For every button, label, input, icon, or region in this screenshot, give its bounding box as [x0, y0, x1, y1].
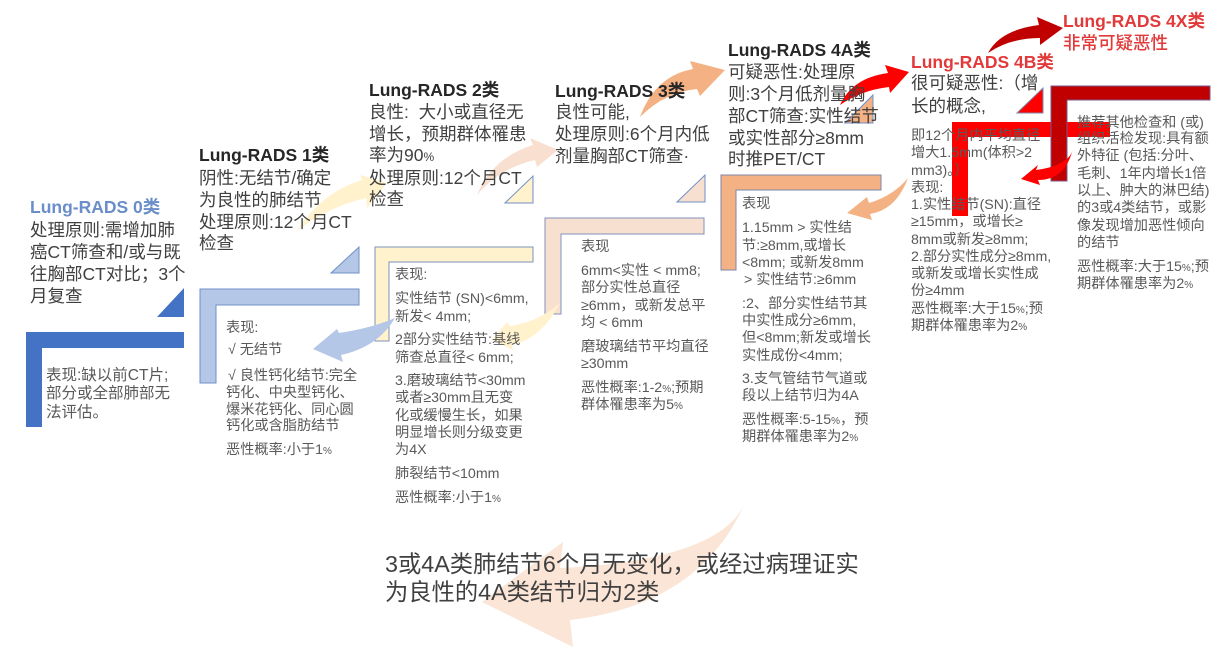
text: category 1 heading and rule	[199, 145, 352, 253]
text: category 0 findings: 部分或全部肺部无	[46, 384, 170, 402]
text: category 2 findings: 为4X	[395, 442, 427, 458]
text: category 4X findings: 的3或4类结节，或影	[1077, 200, 1206, 216]
text: category 4X findings: 推荐其他检查和 (或)	[1077, 115, 1204, 131]
text: category 3 findings: ≥30mm	[581, 356, 628, 372]
bracket: category 4B	[952, 122, 1110, 216]
text: category 4X findings: 以上、肿大的淋巴结)	[1077, 183, 1209, 199]
text: category 4B findings: 表现:	[911, 180, 943, 196]
text: category 4B findings: 1.实性结节(SN):直径	[911, 196, 1041, 213]
text: category 4B findings: 恶性概率:大于15%;预	[911, 300, 1043, 317]
text: category 2 findings: 实性结节 (SN)<6mm,	[395, 291, 529, 307]
arrow: category 2 to 3	[477, 138, 558, 195]
text: category 4A findings: 恶性概率:5-15%，预	[742, 411, 868, 428]
text: category 3 findings: 部分实性总直径	[581, 279, 680, 296]
text: category 4X findings: 外特征 (包括:分叶、	[1077, 148, 1203, 164]
triangle: category 0	[157, 288, 184, 317]
triangle: category 2	[505, 176, 533, 203]
text: category 2 heading and rule: 处理原则:12个月CT	[369, 168, 522, 188]
text: category 4X heading	[1063, 11, 1205, 53]
text: category 2 findings: 明显增长则分级变更	[395, 425, 523, 441]
text: category 3 findings	[581, 239, 709, 413]
text: category 0 findings	[46, 366, 170, 421]
bracket: category 2	[375, 247, 533, 341]
text: category 1 findings	[226, 320, 357, 458]
text: category 1 findings: 恶性概率:小于1%	[226, 441, 332, 458]
text: category 3 heading and rule: 剂量胸部CT筛查·	[555, 146, 689, 166]
arrow: category 4B to 4X	[988, 17, 1063, 53]
text: category 2 findings	[395, 267, 529, 506]
text: category 2 findings: 表现:	[395, 267, 427, 283]
text: category 4A findings: <8mm; 或新发8mm	[742, 255, 864, 271]
arrow: 4B back to 4A	[847, 178, 908, 220]
text: category 3 findings: 表现	[581, 239, 609, 255]
bracket: category 1	[200, 289, 359, 383]
text: category 4B heading and rule: 很可疑恶性:（增	[911, 73, 1038, 93]
text: category 1 heading and rule: 处理原则:12个月CT	[199, 212, 352, 232]
text: category 2 findings: 恶性概率:小于1%	[395, 489, 501, 506]
text: category 4A findings: 3.支气管结节气道或	[742, 371, 867, 387]
text: category 2 heading and rule: 增长，预期群体罹患	[369, 124, 526, 144]
text: category 0 heading and rule	[30, 197, 186, 306]
text: category 4A heading and rule: 可疑恶性:处理原	[728, 62, 855, 82]
text: category 4X findings: 期群体罹患率为2%	[1077, 275, 1193, 292]
text: category 4B findings: 或新发或增长实性成	[911, 266, 1039, 282]
bracket: category 3	[545, 218, 704, 314]
text: category 1 findings: √ 良性钙化结节:完全	[228, 367, 357, 384]
text: category 4B heading and rule	[911, 52, 1054, 116]
text: category 2 findings: 化或缓慢生长，如果	[395, 407, 523, 424]
text: category 3 heading and rule	[555, 81, 710, 166]
text: category 2 heading and rule: 率为90%	[369, 145, 434, 165]
text: category 4A heading and rule: Lung-RADS 4A类	[728, 40, 871, 60]
text: category 1 heading and rule: 阴性:无结节/确定	[199, 168, 331, 188]
text: category 4X findings: 毛刺、1年内增长1倍	[1077, 166, 1206, 182]
text: bottom note	[385, 551, 859, 605]
triangle: category 3	[677, 175, 705, 202]
text: category 3 findings: 均 < 6mm	[581, 315, 643, 331]
text: category 0 heading and rule: 往胸部CT对比；3个	[30, 264, 186, 284]
text: category 4X heading: 非常可疑恶性	[1063, 33, 1168, 53]
arrow: 4X back to 4B	[1021, 152, 1072, 185]
text: bottom note: 3或4A类肺结节6个月无变化，或经过病理证实	[385, 551, 859, 577]
text: category 3 findings: 恶性概率:1-2%;预期	[581, 379, 703, 396]
text: category 4X findings: 组织活检发现:具有额	[1077, 131, 1209, 147]
text: category 2 findings: 筛查总直径< 6mm;	[395, 349, 514, 366]
text: category 4B heading and rule: Lung-RADS 4B类	[911, 52, 1054, 72]
arrow: category 1 to 2	[296, 175, 387, 232]
text: category 2 heading and rule: Lung-RADS 2类	[369, 80, 500, 100]
text: category 4A findings: 但<8mm;新发或增长	[742, 330, 871, 346]
text: category 4A findings: 实性成份<4mm;	[742, 348, 843, 364]
arrow: 3 back to 2	[492, 303, 560, 350]
triangle: category 1	[331, 247, 359, 273]
text: category 3 findings: 磨玻璃结节平均直径	[581, 338, 709, 355]
text: category 2 findings: 肺裂结节<10mm	[395, 466, 499, 482]
text: category 4X findings	[1077, 115, 1209, 292]
text: category 1 findings: 表现:	[226, 320, 258, 336]
text: category 4A heading and rule: 时推PET/CT	[728, 149, 826, 169]
text: category 1 heading and rule: Lung-RADS 1类	[199, 145, 330, 165]
text: category 4A findings: 段以上结节归为4A	[742, 387, 859, 404]
text: category 4A findings: > 实性结节:≥6mm	[744, 272, 856, 288]
text: category 4A heading and rule: 部CT筛查:实性结节	[728, 106, 879, 126]
text: category 3 heading and rule: 处理原则:6个月内低	[555, 124, 710, 144]
text: category 0 heading and rule: 癌CT筛查和/或与既	[30, 242, 181, 262]
text: category 4X findings: 恶性概率:大于15%;预	[1077, 258, 1209, 275]
text: category 1 findings: √ 无结节	[228, 342, 282, 358]
arrow: large return arrow	[482, 503, 745, 647]
text: category 2 findings: 2部分实性结节:基线	[395, 331, 520, 348]
bracket: category 0	[26, 332, 184, 427]
text: category 4A findings	[742, 196, 871, 445]
text: category 4B findings: 8mm或新发≥8mm;	[911, 232, 1028, 248]
text: category 4B findings: 份≥4mm	[911, 283, 965, 299]
text: category 4X heading: Lung-RADS 4X类	[1063, 11, 1205, 31]
text: category 3 heading and rule: Lung-RADS 3类	[555, 81, 686, 101]
text: category 4B findings: 增大1.5mm(体积>2	[911, 145, 1032, 161]
text: category 3 findings: 群体罹患率为5%	[581, 396, 683, 413]
arrow: category 4A to 4B	[840, 65, 909, 105]
text: category 4B findings: 期群体罹患率为2%	[911, 317, 1027, 334]
text: category 4B findings: 2.部分实性成分≥8mm,	[911, 249, 1051, 265]
text: category 4X findings: 像发现增加恶性倾向	[1077, 218, 1205, 234]
text: category 4A findings: 1.15mm > 实性结	[742, 220, 852, 236]
triangle: category 4B	[1017, 88, 1043, 113]
text: category 3 findings: 6mm<实性 < mm8;	[581, 263, 701, 279]
text: category 1 heading and rule: 为良性的肺结节	[199, 190, 322, 210]
triangle: category 4A	[845, 95, 873, 123]
text: category 1 heading and rule: 检查	[199, 233, 234, 253]
text: category 0 findings: 法评估。	[46, 403, 108, 421]
text: bottom note: 为良性的4A类结节归为2类	[385, 579, 659, 605]
text: category 4A findings: 期群体罹患率为2%	[742, 428, 858, 445]
text: category 4A findings: :2、部分实性结节其	[742, 296, 867, 312]
text: category 4A findings: 中实性成分≥6mm,	[742, 313, 856, 329]
text: category 4A findings: 节:≥8mm,或增长	[742, 238, 846, 254]
text: category 2 heading and rule: 良性: 大小或直径无	[369, 102, 524, 122]
text: category 3 heading and rule: 良性可能,	[555, 102, 630, 122]
text: category 2 findings: 3.磨玻璃结节<30mm	[395, 372, 525, 389]
text: category 1 findings: 爆米花钙化、同心圆	[226, 402, 354, 418]
text: category 3 findings: ≥6mm，或新发总平	[581, 298, 705, 314]
text: category 0 heading and rule: 处理原则:需增加肺	[30, 220, 175, 240]
text: category 4B findings: mm3)。）	[911, 163, 969, 179]
text: category 4A heading and rule: 则:3个月低剂量胸	[728, 84, 865, 104]
text: category 2 findings: 或者≥30mm且无变	[395, 390, 513, 406]
text: category 0 heading and rule: 月复查	[30, 286, 82, 306]
arrow: category 3 to 4A	[640, 61, 725, 117]
text: category 1 findings: 钙化或含脂肪结节	[226, 418, 340, 434]
bracket: category 4X	[1051, 86, 1210, 181]
text: category 2 heading and rule: 检查	[369, 189, 404, 209]
text: category 2 heading and rule	[369, 80, 526, 209]
text: category 0 heading and rule: Lung-RADS 0类	[30, 197, 161, 217]
text: category 4A heading and rule	[728, 40, 879, 169]
text: category 4B findings	[911, 127, 1051, 334]
bracket: category 4A	[721, 175, 881, 270]
text: category 2 findings: 新发< 4mm;	[395, 309, 471, 325]
text: category 4A heading and rule: 或实性部分≥8mm	[728, 128, 864, 148]
text: category 4X findings: 的结节	[1077, 235, 1120, 251]
text: category 4A findings: 表现	[742, 196, 770, 212]
text: category 1 findings: 钙化、中央型钙化、	[226, 385, 354, 401]
text: category 4B heading and rule: 长的概念,	[911, 96, 986, 116]
text: category 0 findings: 表现:缺以前CT片;	[46, 366, 168, 384]
text: category 4B findings: ≥15mm，或增长≥	[911, 214, 1023, 230]
text: category 4B findings: 即12个月内平均直径	[911, 127, 1040, 144]
arrow: 2 back to 1	[313, 318, 395, 362]
